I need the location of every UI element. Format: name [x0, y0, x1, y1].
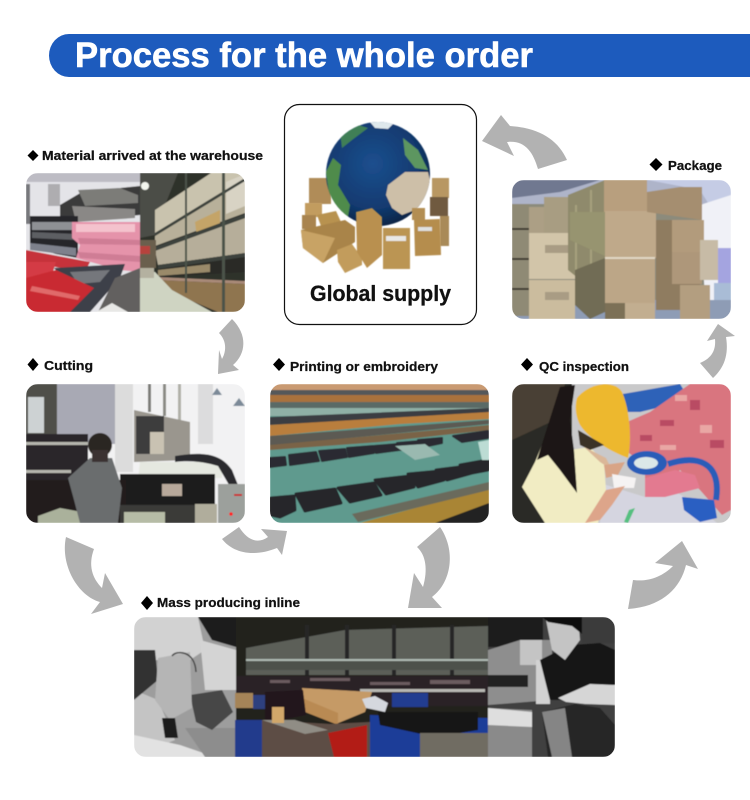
pads: second row	[270, 431, 488, 467]
photo: cutting	[26, 384, 245, 523]
arrow: material to cutting	[218, 319, 243, 374]
panel: global supply	[284, 104, 476, 324]
photo: mass producing	[134, 617, 615, 757]
title banner	[49, 34, 750, 77]
heading: cutting: Cutting	[44, 358, 93, 373]
icon: boxes behind globe	[309, 178, 449, 246]
title banner: Process for the whole order	[75, 36, 533, 75]
photo: package	[512, 180, 731, 319]
icon: earth globe	[326, 122, 432, 226]
label: global supply: Global supply	[310, 281, 452, 306]
photo: qc inspection	[512, 384, 731, 523]
arrow: printing to mass producing	[408, 527, 450, 608]
heading: printing or embroidery: Printing or embroidery	[290, 359, 439, 374]
heading: material arrived: Material arrived at the warehouse	[42, 148, 263, 163]
arrow: qc to package	[700, 324, 735, 378]
icon: cardboard boxes front	[301, 203, 441, 273]
arrow: cutting to printing	[222, 527, 287, 555]
heading: package: Package	[668, 158, 722, 173]
arrow: cutting to mass producing	[65, 537, 123, 614]
heading: mass producing inline: Mass producing inline	[157, 595, 300, 610]
heading: qc inspection: QC inspection	[539, 359, 629, 374]
heading: cutting	[28, 358, 93, 373]
pads: front row	[271, 460, 488, 517]
photo: material warehouse	[26, 173, 245, 312]
photo: printing	[270, 384, 489, 523]
arrow: package to global supply	[482, 115, 567, 169]
arrow: mass producing to qc	[628, 541, 698, 609]
